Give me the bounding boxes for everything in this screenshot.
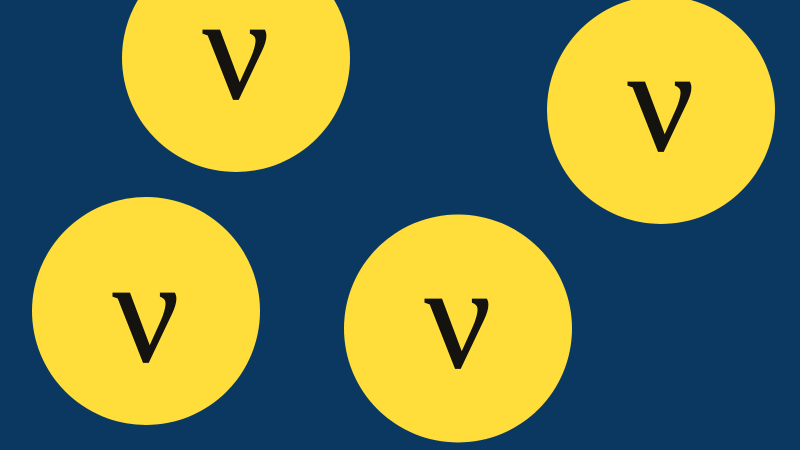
neutrino circle: bottom left: ν — [113, 230, 179, 394]
neutrino circle: top right — [547, 0, 775, 224]
neutrino circle: bottom left — [32, 197, 260, 425]
neutrino circle: top left — [122, 0, 350, 172]
neutrino circle: bottom centre: ν — [425, 236, 491, 400]
neutrino circle: bottom centre — [344, 214, 572, 442]
neutrino circle: top right: ν — [628, 19, 694, 183]
